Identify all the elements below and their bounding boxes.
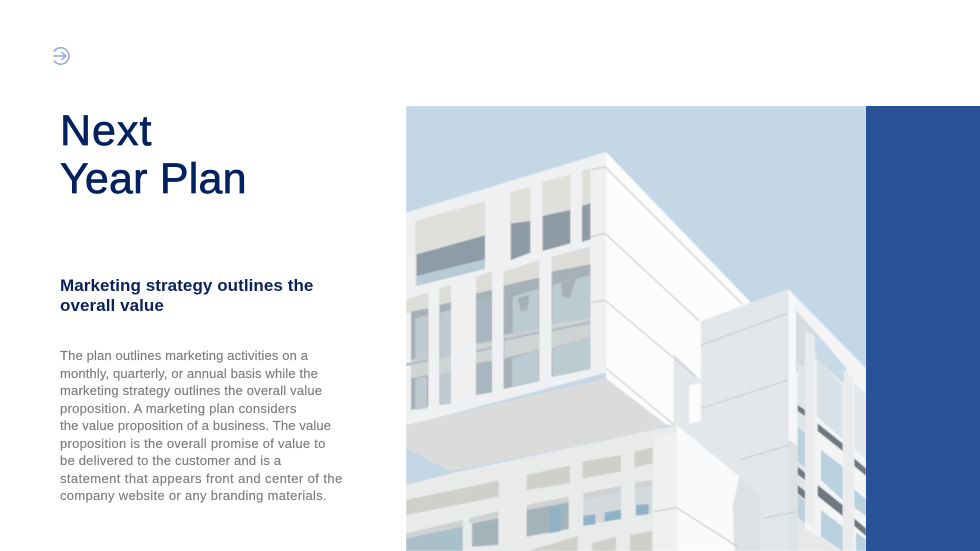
title: Next — [60, 107, 152, 155]
upper row windows — [415, 169, 590, 286]
second row windows — [406, 247, 590, 410]
body text: The plan outlines marketing activities on a — [60, 348, 308, 363]
body text — [60, 348, 343, 503]
body text: the value proposition of a business. The value — [60, 418, 331, 433]
subheading: overall value — [60, 296, 164, 315]
lower block — [406, 425, 761, 551]
body text: statement that appears front and center of the — [60, 470, 343, 486]
body text: monthly, quarterly, or annual basis while the — [60, 366, 318, 380]
subheading — [60, 276, 313, 315]
body text: proposition is the overall promise of value to — [60, 436, 326, 450]
upper block — [406, 152, 751, 479]
icon: arrow in circle — [53, 47, 70, 65]
subheading: Marketing strategy outlines the — [60, 276, 313, 295]
body text: marketing strategy outlines the overall value — [60, 383, 322, 398]
photo: white building against sky — [406, 106, 866, 551]
blue side panel — [866, 106, 980, 551]
body text: company website or any branding materials. — [60, 488, 327, 503]
title: Year Plan — [60, 155, 247, 203]
underside of upper block — [406, 378, 667, 472]
right tower — [701, 289, 866, 551]
body text: be delivered to the customer and is a — [60, 453, 281, 468]
title — [60, 107, 247, 203]
body text: proposition. A marketing plan considers — [60, 400, 297, 416]
